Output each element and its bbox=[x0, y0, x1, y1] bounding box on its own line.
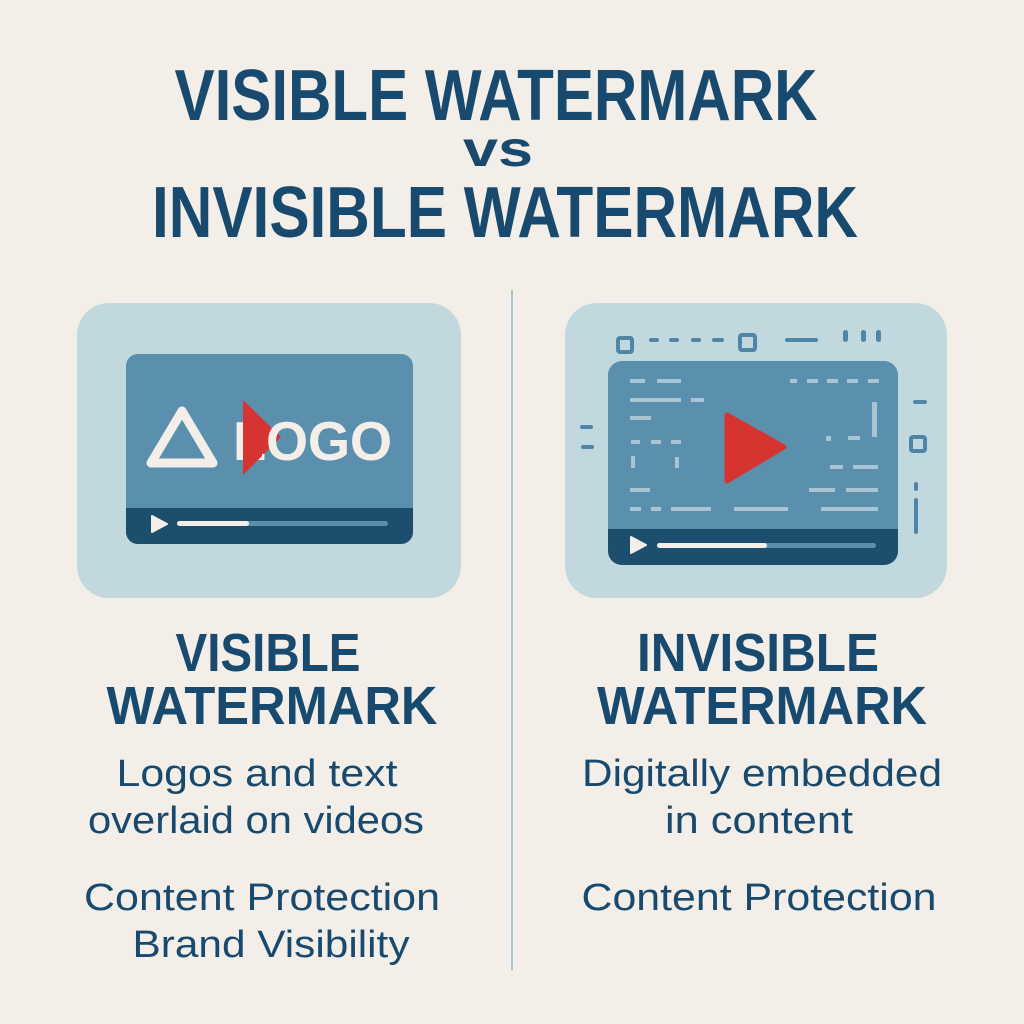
video screen with logo bbox=[126, 354, 413, 544]
panel: visible watermark illustration bbox=[77, 303, 461, 598]
heading: invisible: WATERMARK bbox=[597, 676, 927, 736]
icon: red play bbox=[727, 415, 784, 481]
heading: invisible: INVISIBLE bbox=[637, 623, 879, 683]
title: INVISIBLE WATERMARK bbox=[152, 173, 858, 253]
icon: red play: LOGO bbox=[233, 410, 392, 472]
text: visible description: Brand Visibility bbox=[132, 924, 410, 966]
divider bbox=[511, 290, 513, 970]
title: VISIBLE WATERMARK bbox=[174, 56, 818, 136]
text: invisible description: Digitally embedded bbox=[582, 753, 942, 795]
text: invisible description bbox=[582, 753, 942, 919]
panel: invisible watermark illustration bbox=[565, 303, 947, 598]
icon: logo triangle bbox=[151, 411, 213, 463]
text: visible description: overlaid on videos bbox=[88, 800, 424, 842]
title bbox=[152, 56, 858, 253]
text: visible description: Logos and text bbox=[116, 753, 398, 795]
logo text: LOGO bbox=[233, 410, 392, 472]
text: invisible description: Content Protection bbox=[582, 877, 936, 919]
title: vs bbox=[463, 121, 533, 177]
heading: visible: VISIBLE bbox=[176, 623, 360, 683]
text: invisible description: in content bbox=[665, 800, 853, 842]
heading: visible bbox=[106, 623, 438, 736]
heading: visible: WATERMARK bbox=[106, 676, 438, 736]
video screen with hidden data bbox=[608, 361, 898, 565]
decorations outside screen bbox=[580, 330, 927, 534]
heading: invisible bbox=[597, 623, 927, 736]
text: visible description bbox=[84, 753, 440, 966]
text: visible description: Content Protection bbox=[84, 877, 440, 919]
